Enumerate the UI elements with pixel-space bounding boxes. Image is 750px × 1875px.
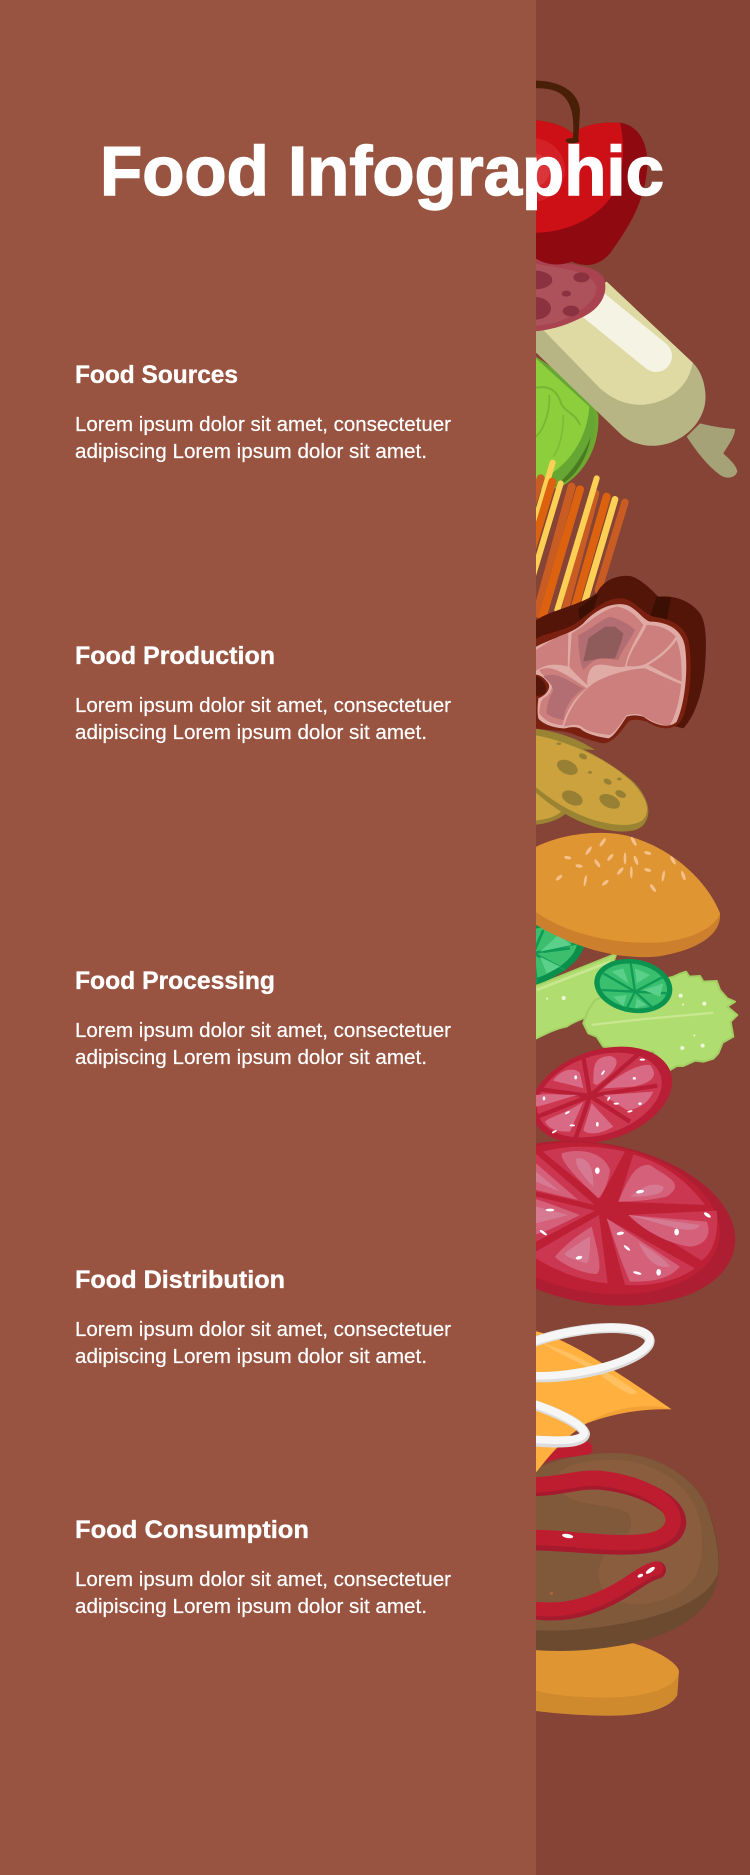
title: Food Infographic (100, 132, 664, 210)
icon: cabbage (533, 355, 598, 490)
icon: spaghetti and ham (517, 463, 706, 832)
icon: cucumber slices (466, 907, 677, 1019)
icon: bottom bun (533, 1643, 679, 1716)
section: Food Processing: adipiscing Lorem ipsum dolor sit amet. (75, 1047, 427, 1069)
section: Food Distribution: Lorem ipsum dolor sit amet, consectetuer (75, 1319, 451, 1341)
section: Food Sources: adipiscing Lorem ipsum dolor sit amet. (75, 441, 427, 463)
icon: bun, lettuce and tomato (445, 833, 748, 1326)
icon: ketchup drizzle (530, 1478, 677, 1612)
section: Food Distribution: adipiscing Lorem ipsum dolor sit amet. (75, 1346, 427, 1368)
section: Food Consumption: Food Consumption (75, 1516, 309, 1544)
icon: sausage (502, 81, 737, 490)
section: Food Processing (75, 967, 451, 1069)
icon: lettuce (533, 953, 737, 1070)
section: Food Consumption: adipiscing Lorem ipsum dolor sit amet. (75, 1596, 427, 1618)
icon: ham (533, 576, 706, 743)
section: Food Sources: Food Sources (75, 361, 238, 389)
section: Food Production: Lorem ipsum dolor sit amet, consectetuer (75, 695, 451, 717)
icon: second cracker (533, 728, 648, 832)
icon: large tomato slice (445, 1120, 748, 1326)
section: Food Distribution (75, 1266, 451, 1368)
icon: small tomato slice (519, 1030, 685, 1160)
panel: left content (0, 0, 536, 1875)
section: Food Sources: Lorem ipsum dolor sit amet, consectetuer (75, 414, 451, 436)
section: Food Sources (75, 361, 451, 463)
section: Food Production: adipiscing Lorem ipsum dolor sit amet. (75, 722, 427, 744)
section: Food Processing: Food Processing (75, 967, 275, 995)
icon: cheese (533, 1331, 672, 1473)
section: Food Production: Food Production (75, 642, 275, 670)
icon: bottom bun, patty, cheese and onion (500, 1318, 719, 1716)
section: Food Production (75, 642, 451, 744)
section: Food Consumption (75, 1516, 451, 1618)
icon: salami (518, 258, 605, 331)
food stack illustration (445, 81, 748, 1716)
icon: burger bun (533, 833, 720, 957)
icon: patty (533, 1453, 719, 1651)
section: Food Consumption: Lorem ipsum dolor sit amet, consectetuer (75, 1569, 451, 1591)
section: Food Distribution: Food Distribution (75, 1266, 285, 1294)
icon: onion rings (500, 1318, 653, 1443)
section: Food Processing: Lorem ipsum dolor sit amet, consectetuer (75, 1020, 451, 1042)
icon: apple (502, 81, 647, 265)
